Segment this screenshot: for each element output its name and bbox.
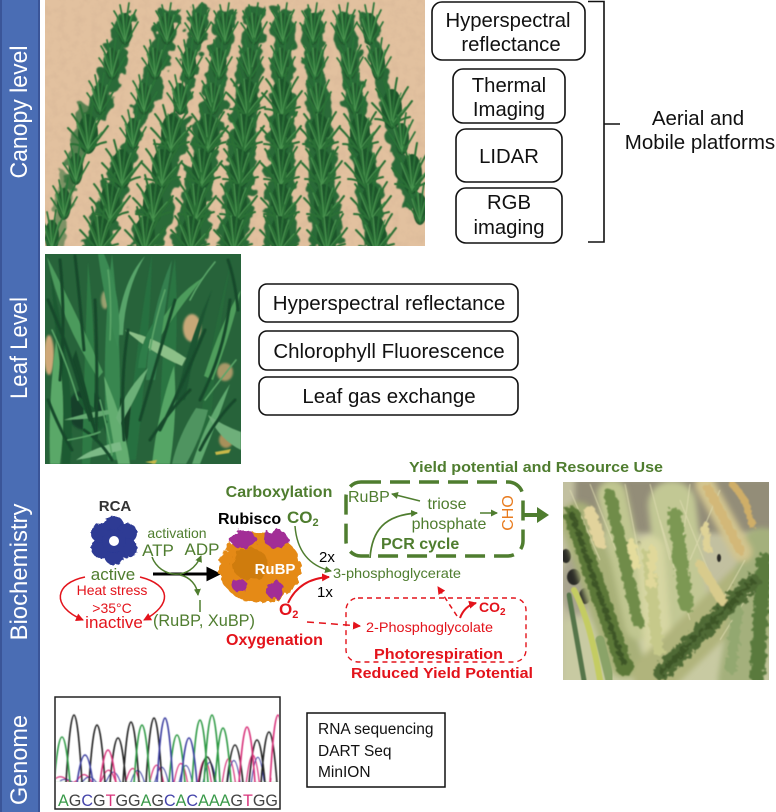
box: thermal imaging [453, 69, 565, 123]
text: aerial and mobile platforms: Aerial and [652, 107, 744, 130]
text: aerial and mobile platforms [625, 107, 775, 154]
box: thermal imaging: Imaging [473, 99, 545, 121]
photo: wheat leaves close-up [44, 254, 241, 464]
chart: DNA sequence chromatogram [54, 697, 286, 810]
arrows: ATP to ADP and inhibitor [152, 556, 201, 612]
bracket: groups canopy sensors [588, 2, 620, 242]
text: CHO: CHO [500, 495, 517, 531]
arrow: triose phosphate to RuBP [392, 494, 420, 501]
box: LIDAR [456, 129, 562, 182]
text: triose phosphate [412, 496, 486, 533]
arrow: 2-phosphoglycolate releases CO2 [460, 603, 476, 618]
text: active: active [91, 565, 135, 584]
text: reduced yield potential: Reduced Yield Potential [351, 665, 533, 682]
text: RuBP in PCR cycle: RuBP [348, 489, 390, 506]
text: CO2 released: 2 [500, 607, 506, 618]
text: triose phosphate: triose [427, 496, 467, 513]
box: hyperspectral reflectance (canopy) [432, 2, 585, 60]
label: canopy level: Canopy level [6, 46, 33, 178]
arrow: RCA activates Rubisco [153, 569, 218, 579]
box: thermal imaging: Thermal [472, 75, 546, 97]
text: activation ATP ADP: activation [147, 525, 207, 541]
panel: photorespiration dashed box [346, 598, 526, 662]
text: activation ATP ADP: ADP [185, 540, 219, 559]
text: inactive: inactive [85, 613, 143, 632]
photo: wheat spikes [560, 478, 775, 685]
label: Rubisco: Rubisco [218, 511, 281, 528]
heading: yield potential and resource use: Yield potential and Resource Use [409, 459, 663, 476]
box: genome sequencing methods: RNA sequencing [318, 721, 433, 738]
box: LIDAR: LIDAR [479, 146, 539, 168]
text: triose phosphate: phosphate [412, 516, 486, 533]
box: leaf gas exchange [259, 377, 518, 415]
panel: PCR cycle dashed box [346, 482, 523, 556]
box: hyperspectral reflectance (leaf) [259, 284, 518, 322]
arrow: CO2 to 3-phosphoglycerate [295, 526, 331, 571]
arrow: CHO output [523, 507, 549, 523]
box: hyperspectral reflectance (leaf): Hyperspectral reflectance [273, 292, 505, 315]
text: 2-phosphoglycolate: 2-Phosphoglycolate [366, 619, 493, 635]
box: hyperspectral reflectance (canopy): reflectance [461, 34, 561, 56]
box: genome sequencing methods: MinION [318, 764, 371, 781]
box: chlorophyll fluorescence [259, 331, 518, 370]
text: PCR cycle: PCR cycle [381, 536, 459, 553]
label: biochemistry: Biochemistry [6, 504, 33, 640]
text: oxygenation: Oxygenation [226, 632, 323, 649]
label: genome: Genome [6, 715, 33, 805]
panel: blue level sidebar [0, 0, 40, 812]
text: CO2 released: CO [479, 599, 500, 615]
box: leaf gas exchange: Leaf gas exchange [302, 385, 476, 408]
box: RGB imaging: RGB [487, 192, 531, 214]
arrow: 3-phosphoglycerate to triose phosphate [370, 513, 417, 558]
label: RuBP on Rubisco: RuBP [255, 561, 295, 578]
box: chlorophyll fluorescence: Chlorophyll Fluorescence [273, 340, 505, 363]
box: hyperspectral reflectance (canopy): Hyperspectral [445, 10, 571, 32]
text: aerial and mobile platforms: Mobile platforms [625, 131, 775, 154]
text: activation ATP ADP: ATP [142, 541, 174, 560]
text: CO2 carboxylation input: CO [287, 508, 312, 527]
label: RCA: RCA [99, 498, 131, 515]
text: carboxylation: Carboxylation [226, 484, 332, 501]
icon: RCA ring centre [109, 536, 119, 546]
label: leaf level: Leaf Level [6, 297, 33, 399]
photo: wheat canopy rows on soil [39, 0, 433, 256]
chart traces [56, 714, 279, 782]
box: RGB imaging: imaging [473, 217, 545, 239]
text: 3-phosphoglycerate: 3-phosphoglycerate [333, 565, 461, 581]
icon: Rubisco protein [219, 530, 301, 603]
text: heat stress [77, 582, 147, 616]
arrow: triose phosphate to CHO [480, 512, 497, 514]
arrows: active to inactive [60, 577, 165, 620]
box: genome sequencing methods [307, 713, 445, 787]
text: heat stress: >35°C [92, 600, 132, 616]
text: photorespiration: Photorespiration [374, 646, 503, 663]
text: heat stress: Heat stress [77, 582, 147, 598]
text: 1x: 1x [317, 584, 333, 601]
arrow: O2 to 3-phosphoglycerate [288, 577, 329, 603]
diagram: biochemistry pathway [60, 459, 663, 682]
text: O2: 2 [292, 609, 298, 621]
text: RuBP XuBP: (RuBP, XuBP) [153, 612, 255, 630]
text: O2: O [279, 600, 292, 619]
text: activation ATP ADP [142, 525, 219, 560]
text: CO2 carboxylation input: 2 [312, 517, 319, 529]
text: 2x: 2x [319, 549, 335, 566]
icon: RCA protein ring [91, 516, 137, 565]
chart base letters: AGCGTGGAGCACAAAGTGG [58, 791, 278, 810]
arrow: O2 to 2-phosphoglycolate [307, 622, 360, 626]
arrow: 2-phosphoglycolate to 3-phosphoglycerate [438, 587, 457, 616]
box: RGB imaging [456, 188, 562, 243]
box: genome sequencing methods: DART Seq [318, 743, 392, 760]
